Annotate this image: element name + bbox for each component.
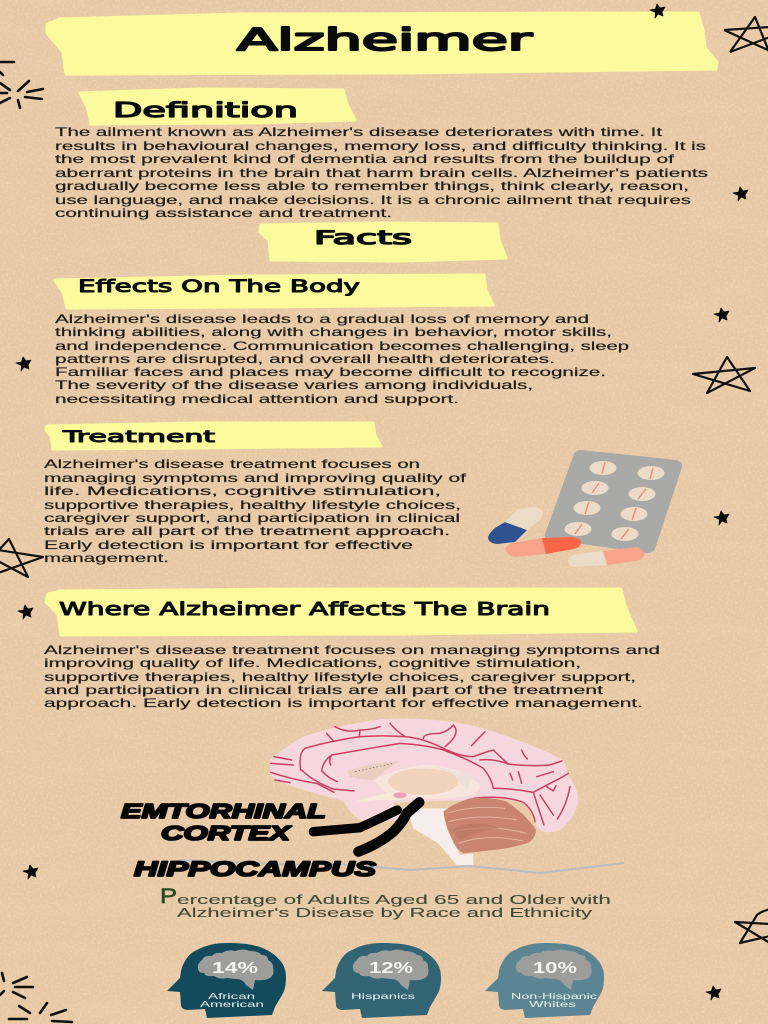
text: definition body: the most prevalent kind of dementia and results from the buildup of	[55, 152, 675, 166]
heading: treatment	[46, 423, 381, 449]
heading: facts	[260, 223, 506, 261]
panel: where alzheimer affects the brain	[44, 589, 660, 881]
heading: definition: Definition	[113, 98, 298, 122]
text: effects body: necessitating medical attention and support.	[55, 392, 459, 406]
arrow: entorhinal cortex pointer	[313, 810, 397, 832]
label: entorhinal cortex: EMTORHINAL	[121, 801, 326, 823]
text: brain body: approach. Early detection is important for effective management.	[44, 696, 643, 710]
cerebellum	[443, 798, 536, 853]
text: effects body: thinking abilities, along with changes in behavior, motor skills,	[55, 325, 612, 339]
stat: african american 14%: African	[208, 992, 255, 1001]
text: treatment body: Alzheimer's disease treatment focuses on	[44, 457, 420, 471]
chart title	[160, 885, 611, 920]
text: treatment body: caregiver support, and participation in clinical	[44, 511, 460, 525]
stat: hispanics 12%: 12%	[369, 960, 413, 977]
text: definition body: gradually become less able to remember things, think clearly, reason,	[55, 179, 689, 193]
banner: title	[47, 13, 717, 74]
heading: where alzheimer affects the brain	[46, 589, 636, 635]
stat: hispanics 12%: Hispanics	[351, 992, 415, 1001]
heading: treatment: Treatment	[61, 427, 215, 446]
heading: effects on the body	[55, 275, 493, 308]
text: brain body: improving quality of life. Medications, cognitive stimulation,	[44, 656, 581, 670]
heading: effects on the body: Effects On The Body	[78, 277, 360, 297]
text: treatment body: supportive therapies, healthy lifestyle choices,	[44, 498, 461, 512]
stat: non-hispanic whites 10%: Whites	[529, 1000, 576, 1009]
decoration: burst marks	[0, 62, 72, 1022]
text: treatment body	[44, 457, 467, 565]
chart title: Alzheimer's Disease by Race and Ethnicity	[177, 906, 593, 920]
arrow: hippocampus pointer	[358, 802, 419, 852]
text: effects body: The severity of the disease varies among individuals,	[55, 378, 533, 392]
text: brain body	[44, 643, 660, 710]
text: definition body: aberrant proteins in the brain that harm brain cells. Alzheimer's patients	[55, 166, 708, 180]
label: entorhinal cortex: CORTEX	[161, 823, 293, 845]
panel: definition	[55, 89, 708, 220]
stat: african american 14%: American	[200, 1000, 264, 1009]
cingulate band	[347, 761, 400, 780]
text: treatment body: Early detection is important for effective	[44, 538, 414, 552]
panel: effects on the body	[55, 275, 630, 406]
text: brain body: Alzheimer's disease treatment focuses on managing symptoms and	[44, 643, 660, 657]
text: effects body: Alzheimer's disease leads to a gradual loss of memory and	[55, 312, 589, 326]
corpus callosum	[375, 764, 480, 799]
text: treatment body: life. Medications, cognitive stimulation,	[44, 484, 441, 498]
text: effects body	[55, 312, 630, 406]
text: brain body: and participation in clinical trials are all part of the treatment	[44, 683, 604, 697]
text: definition body	[55, 125, 708, 220]
text: definition body: continuing assistance and treatment.	[55, 206, 392, 220]
panel: treatment	[44, 423, 682, 567]
brainstem	[407, 808, 473, 865]
stat: african american 14%	[167, 943, 286, 1018]
heading: definition	[80, 89, 355, 124]
text: effects body: patterns are disrupted, and overall health deteriorates.	[55, 352, 555, 366]
stat: african american 14%: 14%	[212, 960, 258, 977]
text: definition body: The ailment known as Alzheimer's disease deteriorates with time. It	[55, 125, 663, 139]
icon: blister pack and capsules	[488, 450, 682, 567]
stat: hispanics 12%	[322, 943, 441, 1018]
label: entorhinal cortex	[121, 801, 326, 845]
text: effects body: and independence. Communication becomes challenging, sleep	[55, 339, 630, 353]
illustration: brain cross-section	[121, 719, 624, 881]
text: treatment body: trials are all part of the treatment approach.	[44, 524, 450, 538]
cerebrum	[270, 719, 578, 832]
text: definition body: use language, and make decisions. It is a chronic ailment that requires	[55, 193, 691, 207]
stat: non-hispanic whites 10%: 10%	[533, 960, 577, 977]
text: effects body: Familiar faces and places may become difficult to recognize.	[55, 365, 606, 379]
chart title: P	[160, 885, 177, 908]
text: treatment body: management.	[44, 551, 169, 565]
title: Alzheimer	[237, 23, 533, 58]
text: brain body: supportive therapies, healthy lifestyle choices, caregiver support,	[44, 670, 636, 684]
chart title: ercentage of Adults Aged 65 and Older with	[177, 893, 611, 907]
stat: non-hispanic whites 10%	[485, 943, 604, 1018]
text: treatment body: managing symptoms and improving quality of	[44, 471, 467, 485]
panel: percentage by race and ethnicity	[160, 885, 611, 1018]
stat: non-hispanic whites 10%: Non-Hispanic	[511, 992, 597, 1001]
heading: where alzheimer affects the brain: Where Alzheimer Affects The Brain	[59, 599, 550, 620]
heading: facts: Facts	[314, 227, 412, 249]
text: definition body: results in behavioural changes, memory loss, and difficulty thinking. It is	[55, 139, 706, 153]
label: hippocampus: HIPPOCAMPUS	[134, 858, 376, 881]
